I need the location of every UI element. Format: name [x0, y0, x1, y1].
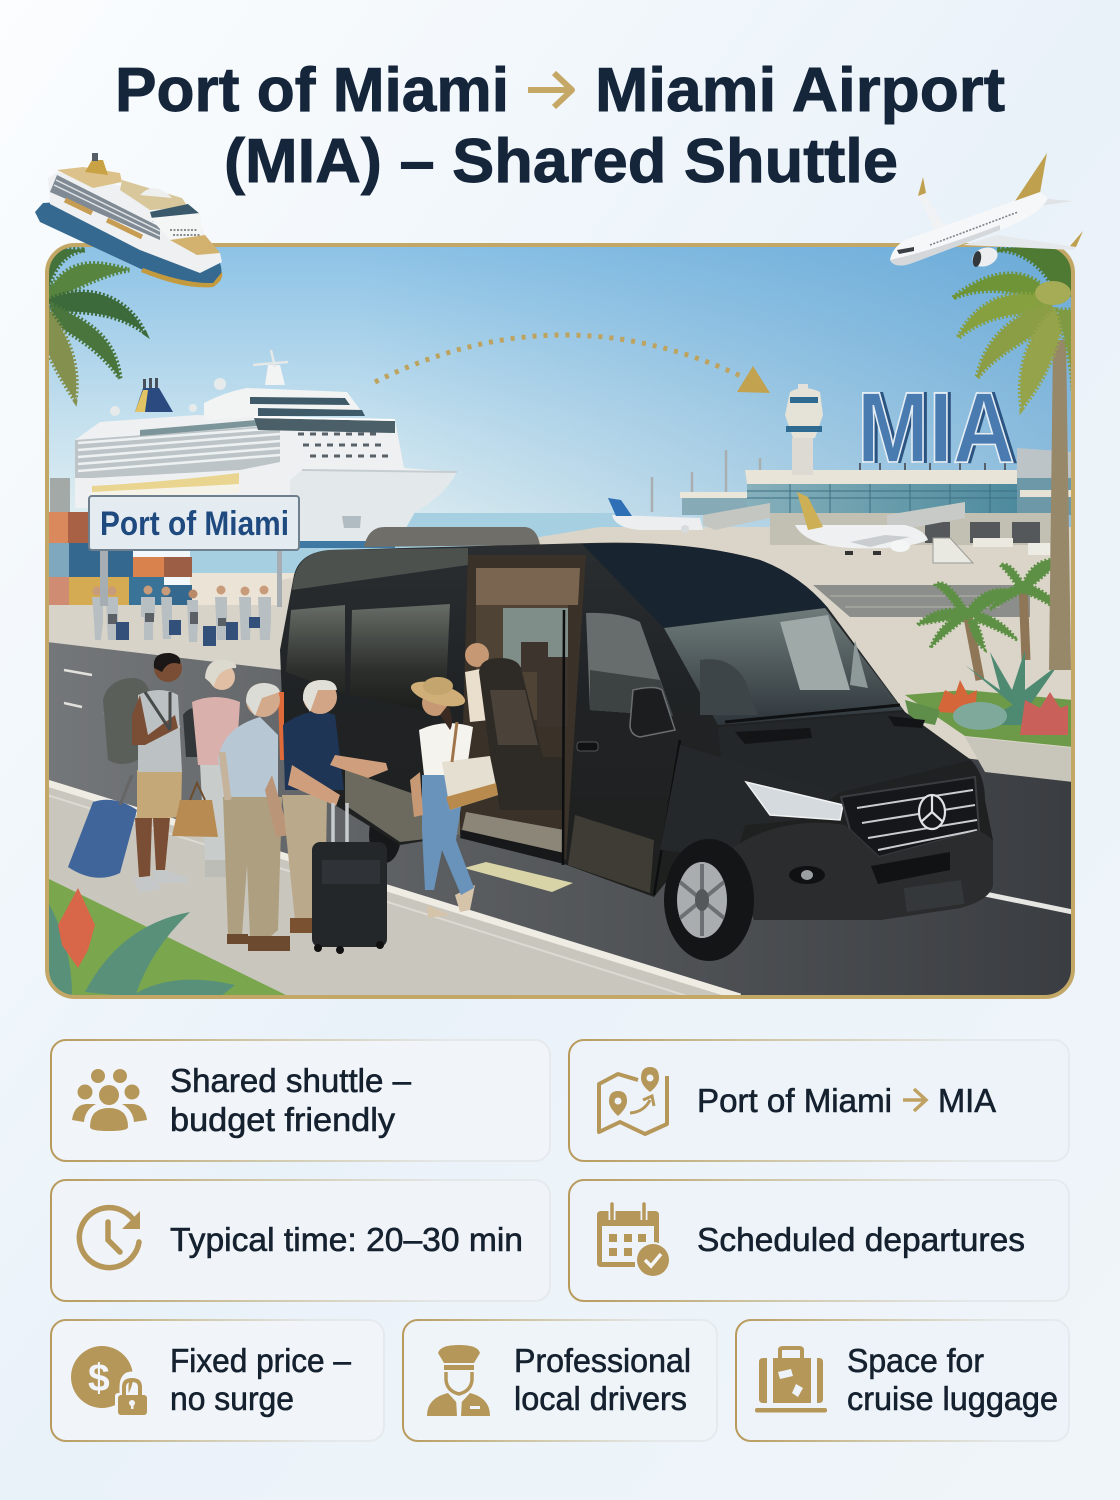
hero illustration panel: [47, 245, 1073, 997]
door seam: [563, 610, 680, 895]
airport terminal with MIA sign and control tower: [652, 372, 1073, 545]
icon: dollar coin with lock: $: [88, 1357, 110, 1400]
cruise ship in port: [75, 350, 457, 548]
badge: [919, 795, 945, 829]
distant pedestrians: [92, 586, 271, 646]
man in navy polo: [282, 680, 388, 954]
sky: [47, 245, 1073, 535]
Port of Miami sign: Port of Miami: [100, 505, 289, 543]
small palms and flower beds: [905, 559, 1068, 735]
icon: group of people: [72, 1069, 147, 1131]
card: luggage: Space for: [847, 1342, 984, 1379]
woman in sun hat: [408, 677, 498, 918]
sea, sand and apron: [190, 513, 1073, 780]
card: professional drivers: Professional: [514, 1342, 691, 1379]
grille: [841, 777, 979, 857]
seated passenger: [465, 643, 490, 722]
door mirror: [630, 688, 675, 737]
icon: route map: [599, 1067, 667, 1134]
icon: calendar with check: [597, 1204, 671, 1278]
shuttle van: [278, 527, 993, 961]
grass and tropical plant, foreground: [47, 878, 290, 997]
card: route: Port of Miami: [697, 1082, 892, 1119]
arrow: [903, 1089, 926, 1111]
rear side windows: [286, 604, 450, 715]
large palm, right: [953, 247, 1073, 670]
open side door interior: [460, 555, 586, 860]
card: shared shuttle: [51, 1040, 550, 1161]
roof vent: [364, 527, 540, 547]
card: shared shuttle: Shared shuttle –: [170, 1062, 412, 1099]
roof front panel: [582, 543, 828, 628]
lower rear panel: [345, 770, 460, 842]
title: Port of Miami: [115, 56, 509, 125]
lower bumper: [729, 823, 993, 920]
parked airplanes: [608, 492, 1050, 563]
card: typical time: [51, 1180, 550, 1301]
dotted route arrow: [375, 335, 770, 393]
lower sill: [568, 815, 654, 893]
title: Miami Airport: [595, 56, 1005, 125]
card: route: [569, 1040, 1069, 1161]
seats: [479, 642, 568, 810]
large palm, left: [48, 248, 144, 400]
title: (MIA) – Shared Shuttle: [224, 127, 898, 196]
front door panel and window: [586, 613, 673, 716]
small airplane ornament: [890, 153, 1083, 270]
passenger with backpack: [68, 653, 188, 893]
card: luggage: cruise luggage: [847, 1380, 1058, 1417]
icon: clock: [79, 1208, 140, 1268]
windshield: [664, 608, 903, 725]
door handle: [577, 742, 598, 751]
icon: suitcase: [755, 1348, 827, 1412]
small cruise ship ornament: [35, 153, 222, 287]
rear panel sheen: [292, 548, 468, 590]
hood: [798, 750, 970, 792]
card: fixed price: no surge: [170, 1380, 294, 1417]
passenger in pink shirt: [172, 660, 240, 877]
front wheel: [664, 839, 754, 961]
card: professional drivers: [403, 1320, 717, 1441]
card: scheduled departures: Scheduled departures: [697, 1221, 1025, 1258]
card: scheduled departures: [569, 1180, 1069, 1301]
title: [115, 56, 1005, 196]
icon: uniformed driver: [427, 1345, 490, 1416]
orange marker: [278, 692, 284, 760]
front wing: [660, 745, 839, 860]
Port of Miami sign: [89, 496, 299, 607]
card: professional drivers: local drivers: [514, 1380, 687, 1417]
group of passengers with luggage: [68, 653, 498, 954]
airport terminal with MIA sign and control tower: MIA: [857, 372, 1015, 484]
cargo containers: [47, 478, 192, 608]
card: route: MIA: [938, 1082, 996, 1119]
road and sidewalks: [47, 605, 1073, 997]
card: fixed price: [51, 1320, 384, 1441]
older man from behind: [218, 683, 290, 951]
running board: [464, 862, 573, 892]
airport terminal with MIA sign and control tower: MIA: [860, 372, 1018, 484]
card: shared shuttle: budget friendly: [170, 1101, 396, 1138]
headlight: [746, 782, 843, 820]
van body: [280, 543, 993, 920]
rear wheel: [369, 826, 400, 863]
icon: dollar coin with lock: [71, 1346, 149, 1417]
card: typical time: Typical time: 20–30 min: [170, 1221, 523, 1258]
card: luggage: [736, 1320, 1069, 1441]
card: fixed price: Fixed price –: [170, 1342, 352, 1379]
